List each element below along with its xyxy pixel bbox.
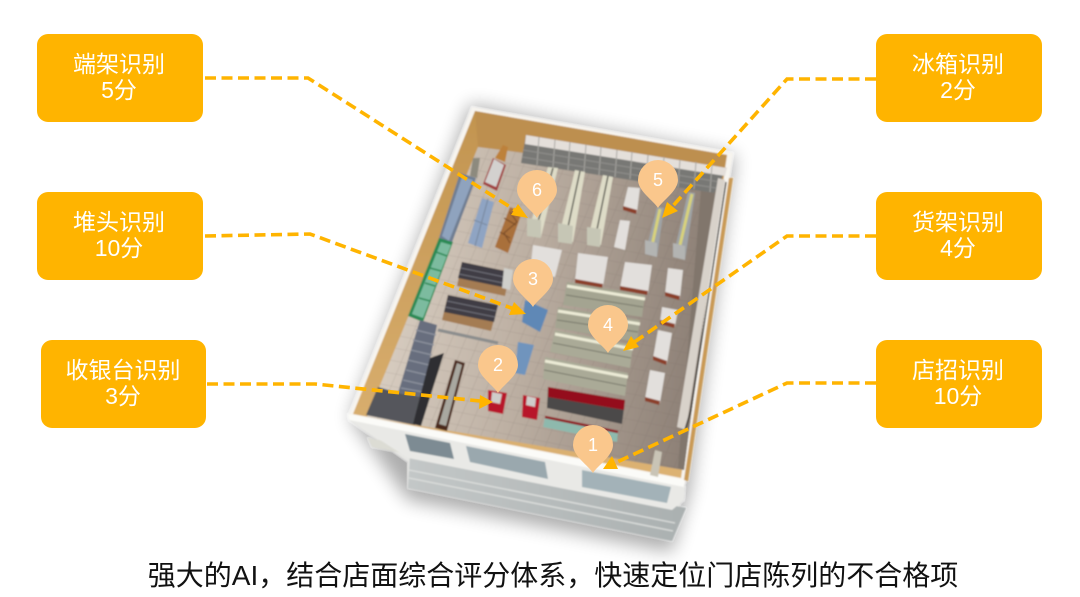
horizontal gondolas (543, 282, 645, 396)
arrow: 端架识别 to shelf end (205, 78, 528, 218)
arrow: 货架识别 to gondola (623, 236, 876, 351)
pin 2: 2 (493, 355, 503, 375)
room walls and floor (348, 107, 733, 487)
label: 端架识别 5分: 5分 (101, 77, 137, 103)
pin 5 (638, 160, 678, 208)
label: 堆头识别 10分 (37, 192, 203, 280)
pin 4 (588, 305, 628, 353)
label: 收银台识别 3分: 收银台识别 (66, 357, 180, 383)
label: 货架识别 4分: 4分 (940, 235, 976, 261)
label: 店招识别 10分 (876, 340, 1042, 428)
label: 收银台识别 3分: 3分 (105, 383, 141, 409)
label: 冰箱识别 2分: 2分 (940, 77, 976, 103)
pin 1 (573, 425, 613, 473)
back wall shelves (521, 135, 727, 193)
pin 3 (513, 259, 553, 307)
staircase (366, 320, 498, 426)
pin 3: 3 (528, 269, 538, 289)
label: 收银台识别 3分 (41, 340, 206, 428)
pin 5: 5 (653, 170, 663, 190)
label: 冰箱识别 2分 (876, 34, 1042, 122)
pin 4: 4 (603, 315, 613, 335)
black racks (442, 262, 513, 331)
label: 堆头识别 10分: 堆头识别 (73, 209, 165, 235)
checkout area (435, 300, 548, 431)
arrow: 冰箱识别 to fridge (662, 79, 876, 218)
left wall coolers (408, 158, 480, 322)
pin 6 (517, 170, 557, 218)
arrow: 收银台识别 to checkout (207, 384, 493, 409)
label: 堆头识别 10分: 10分 (95, 235, 143, 261)
pin 1: 1 (588, 435, 598, 455)
long gondolas (527, 167, 613, 247)
arrow: 堆头识别 to pallet (205, 234, 526, 315)
arrow: 店招识别 to storefront (603, 383, 876, 469)
label: 货架识别 4分 (876, 192, 1042, 280)
freezer and pallets (468, 145, 522, 253)
building base (349, 420, 686, 541)
label: 店招识别 10分: 10分 (934, 383, 982, 409)
right wall shelves (677, 178, 733, 481)
label: 冰箱识别 2分: 冰箱识别 (912, 51, 1004, 77)
label: 端架识别 5分: 端架识别 (73, 51, 165, 77)
island bases (575, 206, 680, 405)
red display (543, 387, 625, 442)
pin 2 (478, 345, 518, 393)
label: 货架识别 4分: 货架识别 (912, 209, 1004, 235)
white islands (530, 187, 683, 477)
label: 店招识别 10分: 店招识别 (912, 357, 1004, 383)
yellow-lit refrigerators (645, 192, 695, 260)
store floor plan (348, 104, 735, 552)
caption: 强大的AI，结合店面综合评分体系，快速定位门店陈列的不合格项 (148, 560, 958, 591)
label: 端架识别 5分 (37, 34, 203, 122)
pin 6: 6 (532, 180, 542, 200)
